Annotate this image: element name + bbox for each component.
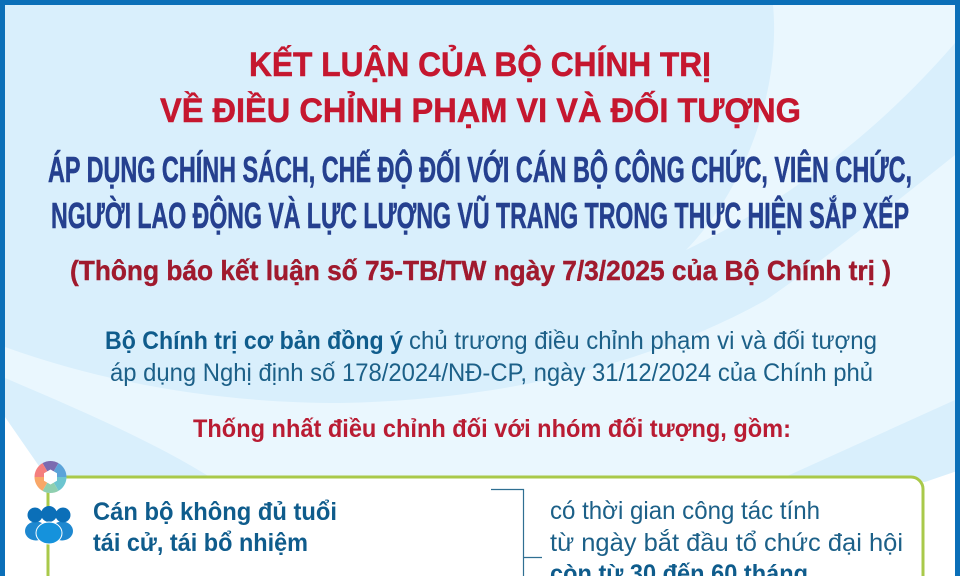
intro text: Bộ Chính trị cơ bản đồng ý (105, 327, 403, 355)
intro text: áp dụng Nghị định số 178/2024/NĐ-CP, ngày 31/12/2024 của Chính phủ (110, 359, 873, 387)
intro text: chủ trương điều chỉnh phạm vi và đối tượng (409, 327, 877, 355)
title: KẾT LUẬN CỦA BỘ CHÍNH TRỊ (249, 45, 711, 84)
icon: aperture (34, 461, 67, 493)
subtitle (48, 148, 912, 236)
source note: (Thông báo kết luận số 75-TB/TW ngày 7/3/2025 của Bộ Chính trị ) (70, 255, 891, 286)
group name: tái cử, tái bổ nhiệm (93, 529, 308, 557)
group condition (550, 497, 903, 576)
panel: group card (48, 477, 923, 576)
section heading: Thống nhất điều chỉnh đối với nhóm đối tượng, gồm: (193, 415, 791, 443)
intro text (105, 327, 877, 387)
group condition: có thời gian công tác tính (550, 497, 820, 525)
group name (93, 498, 337, 557)
icon: people (25, 506, 73, 544)
group name: Cán bộ không đủ tuổi (93, 498, 337, 526)
group condition: từ ngày bắt đầu tổ chức đại hội (550, 528, 903, 557)
bracket connector (491, 490, 542, 576)
title (160, 45, 801, 130)
title: VỀ ĐIỀU CHỈNH PHẠM VI VÀ ĐỐI TƯỢNG (160, 91, 801, 130)
